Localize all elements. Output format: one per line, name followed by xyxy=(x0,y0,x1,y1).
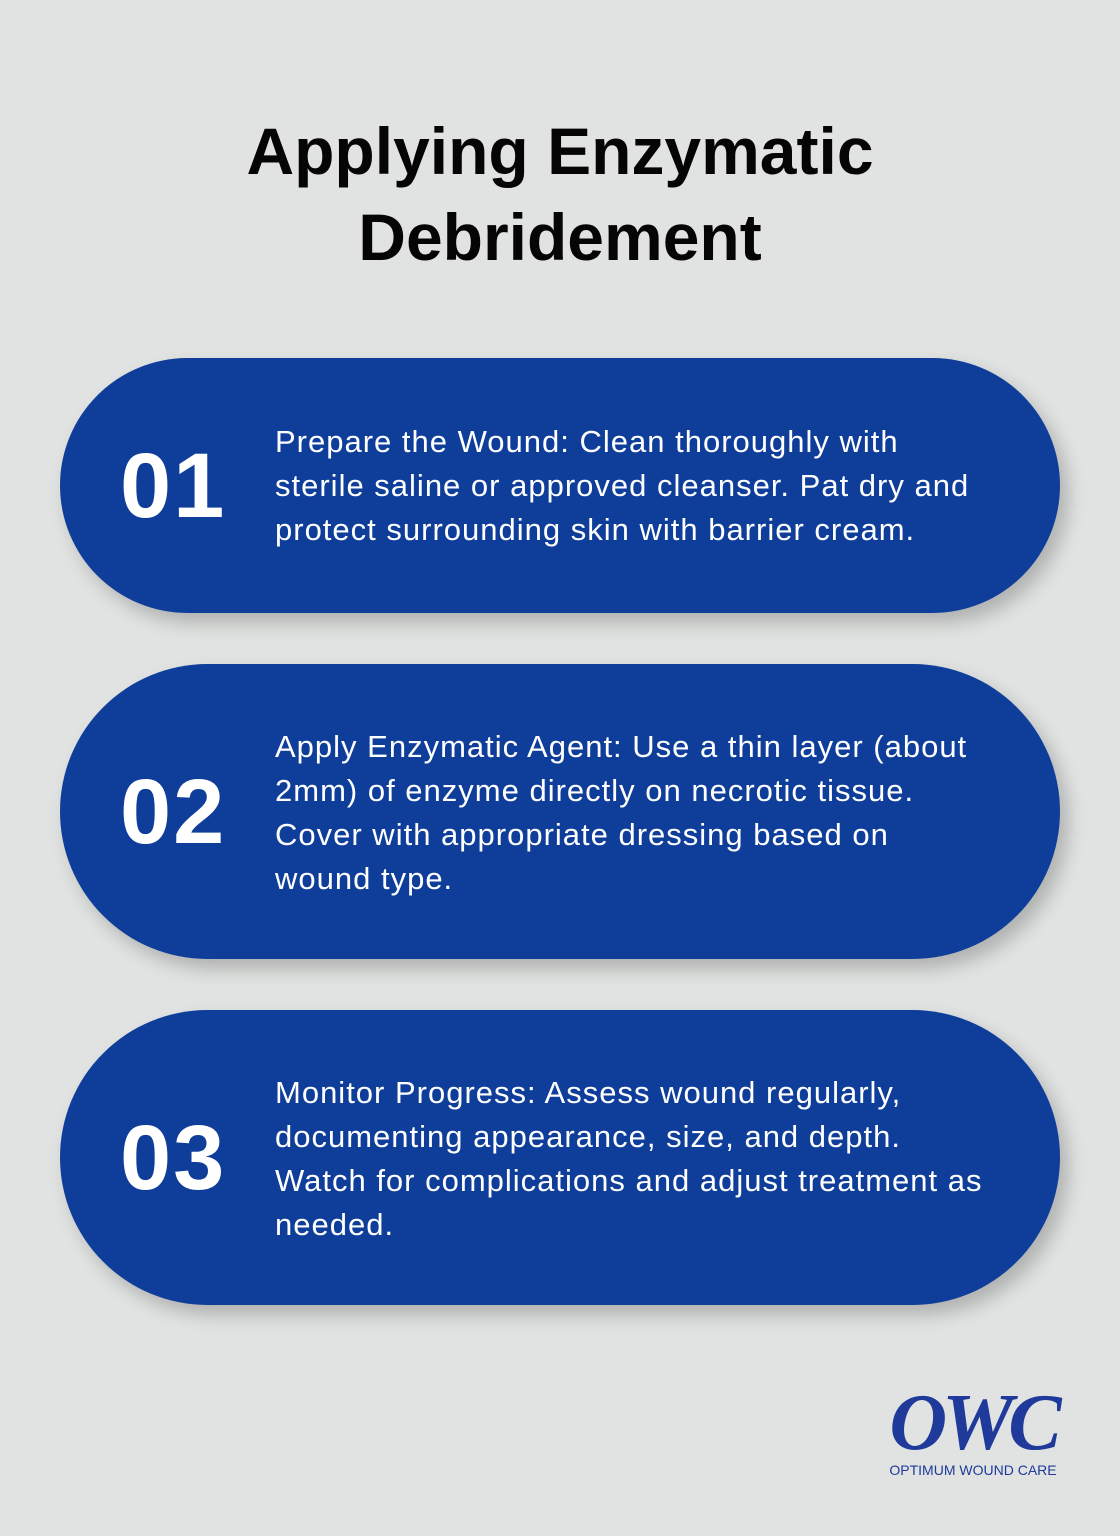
text step 2: 2mm) of enzyme directly on necrotic tissue. xyxy=(275,773,914,808)
logo: OPTIMUM WOUND CARE xyxy=(889,1462,1057,1478)
panel: step 1 xyxy=(60,358,1060,613)
text step 1: protect surrounding skin with barrier cream. xyxy=(275,512,915,547)
title xyxy=(246,114,874,274)
text step 2: Cover with appropriate dressing based on xyxy=(275,817,889,852)
text step 1: Prepare the Wound: Clean thoroughly with xyxy=(275,424,899,459)
text step 3: needed. xyxy=(275,1207,394,1242)
text step 2: wound type. xyxy=(275,861,453,896)
logo: OWC xyxy=(889,1379,1057,1467)
number 03: 03 xyxy=(120,1107,226,1209)
text step 1: sterile saline or approved cleanser. Pat dry and xyxy=(275,468,969,503)
title: Debridement xyxy=(358,200,762,274)
panel: step 3 xyxy=(60,1010,1060,1305)
text step 2 xyxy=(275,729,967,896)
title: Applying Enzymatic xyxy=(246,114,874,188)
text step 1 xyxy=(275,424,969,547)
text step 3: documenting appearance, size, and depth. xyxy=(275,1119,901,1154)
panel: step 2 xyxy=(60,664,1060,959)
text step 3: Monitor Progress: Assess wound regularly, xyxy=(275,1075,901,1110)
number 01: 01 xyxy=(120,435,226,537)
text step 3 xyxy=(275,1075,982,1242)
text step 2: Apply Enzymatic Agent: Use a thin layer (about xyxy=(275,729,967,764)
number 02: 02 xyxy=(120,761,226,863)
text step 3: Watch for complications and adjust treatment as xyxy=(275,1163,982,1198)
